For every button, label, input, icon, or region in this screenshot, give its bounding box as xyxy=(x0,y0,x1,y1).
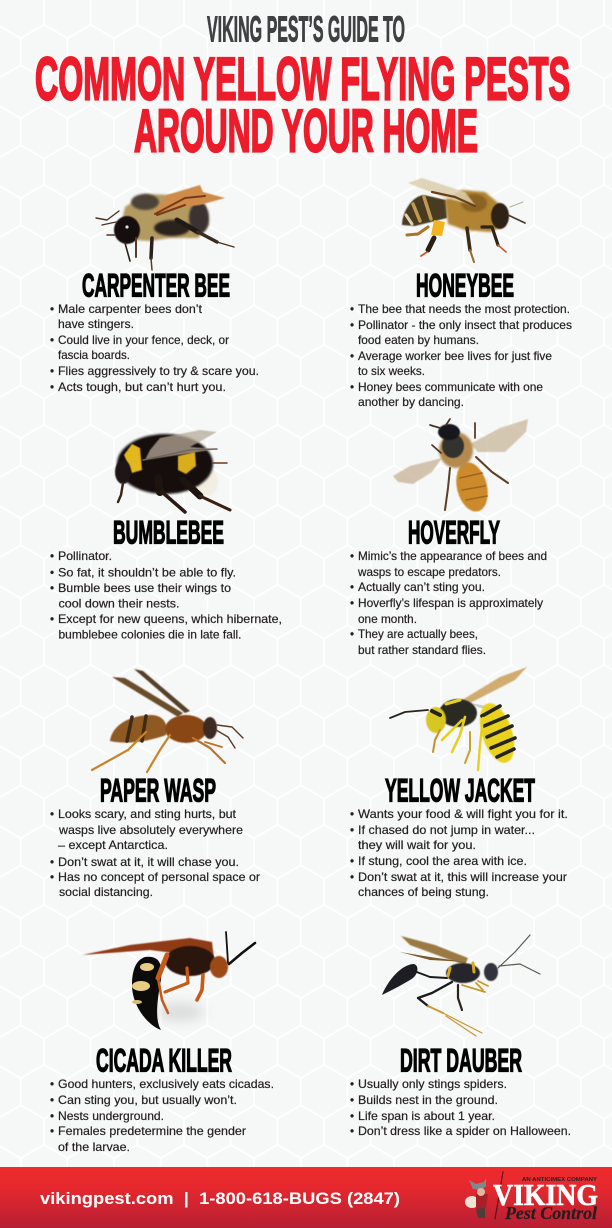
text block: • xyxy=(350,350,354,363)
icon: hoverfly xyxy=(393,419,528,515)
heading: HONEYBEE xyxy=(416,268,514,304)
icon: honeybee xyxy=(402,178,525,262)
text block: • xyxy=(350,1078,354,1091)
text block: • xyxy=(50,1078,54,1091)
icon: yellow jacket xyxy=(390,667,527,770)
text block: • xyxy=(350,1110,354,1123)
text block: Male carpenter bees don’t xyxy=(58,303,203,316)
text block: wasps live absolutely everywhere xyxy=(58,824,243,837)
text block: Hoverfly’s lifespan is approximately xyxy=(358,597,543,610)
text block xyxy=(350,550,547,657)
company tagline: AN ANTICIMEX COMPANY xyxy=(522,1177,597,1183)
heading: CICADA KILLER xyxy=(96,1042,232,1078)
text block: • xyxy=(50,871,54,884)
text block: • xyxy=(350,1125,354,1138)
text block: • xyxy=(50,334,54,347)
text block: Could live in your fence, deck, or xyxy=(58,334,229,347)
text block: Builds nest in the ground. xyxy=(358,1094,498,1107)
text block: Don’t swat at it, it will chase you. xyxy=(58,856,239,869)
icon: viking mascot xyxy=(465,1172,503,1219)
text block: • xyxy=(350,550,354,563)
panel: bumblebee xyxy=(50,430,282,642)
text block: they will wait for you. xyxy=(358,839,476,852)
text block xyxy=(50,808,260,899)
text block: • xyxy=(50,1094,54,1107)
footer band xyxy=(0,1167,612,1228)
logo wordmark: VIKING xyxy=(493,1177,598,1212)
text block: Pollinator - the only insect that produces xyxy=(358,319,572,332)
text block: of the larvae. xyxy=(58,1141,130,1154)
heading: CARPENTER BEE xyxy=(82,268,230,304)
text block: • xyxy=(50,550,54,563)
text block: Average worker bee lives for just five xyxy=(358,350,552,363)
panel: yellow jacket xyxy=(350,667,568,899)
text block: Don’t dress like a spider on Halloween. xyxy=(358,1125,571,1138)
text block: • xyxy=(50,808,54,821)
text block xyxy=(50,1078,274,1154)
text block: If chased do not jump in water... xyxy=(358,824,535,837)
text block: They are actually bees, xyxy=(358,628,478,641)
text block: Females predetermine the gender xyxy=(58,1125,246,1138)
heading: BUMBLEBEE xyxy=(113,514,224,550)
text block: If stung, cool the area with ice. xyxy=(358,855,527,868)
text block: Life span is about 1 year. xyxy=(358,1110,495,1123)
text block: social distancing. xyxy=(59,886,153,899)
text block xyxy=(50,550,282,642)
text block: • xyxy=(50,381,54,394)
text block: wasps to escape predators. xyxy=(357,566,501,579)
text block: • xyxy=(350,303,354,316)
text block: Has no concept of personal space or xyxy=(58,871,260,884)
text block: • xyxy=(350,1094,354,1107)
text block: Looks scary, and sting hurts, but xyxy=(58,808,237,821)
text block: Actually can’t sting you. xyxy=(358,581,485,594)
text block: • xyxy=(350,319,354,332)
text block: • xyxy=(350,628,354,641)
panel: honeybee xyxy=(350,178,572,409)
heading: HOVERFLY xyxy=(408,514,500,550)
text block: • xyxy=(50,1110,54,1123)
heading: PAPER WASP xyxy=(100,772,216,808)
text block: • xyxy=(50,582,54,595)
text block: Usually only stings spiders. xyxy=(358,1078,507,1091)
panel: hoverfly xyxy=(350,419,547,657)
text block: • xyxy=(350,381,354,394)
title block xyxy=(35,8,570,164)
text block: Can sting you, but usually won’t. xyxy=(58,1094,237,1107)
text block xyxy=(350,1078,571,1138)
text block: • xyxy=(50,1125,54,1138)
text block: Nests underground. xyxy=(58,1110,164,1123)
text block: • xyxy=(350,871,354,884)
logo: Viking Pest Control xyxy=(465,1172,598,1223)
panel: paper wasp xyxy=(50,669,260,899)
text block: Mimic’s the appearance of bees and xyxy=(358,550,547,563)
icon: carpenter bee xyxy=(96,185,234,270)
text block: – except Antarctica. xyxy=(58,839,168,852)
panel: cicada killer xyxy=(50,932,274,1154)
text block: food eaten by humans. xyxy=(358,334,479,347)
text block: cool down their nests. xyxy=(58,598,180,610)
contact line: vikingpest.com | 1-800-618-BUGS (2847) xyxy=(40,1190,400,1208)
text block: • xyxy=(350,808,354,821)
text block: • xyxy=(350,581,354,594)
text block: • xyxy=(350,597,354,610)
text block: The bee that needs the most protection. xyxy=(358,303,570,316)
logo subline: Pest Control xyxy=(504,1203,597,1223)
text block: Flies aggressively to try & scare you. xyxy=(58,365,259,378)
text block: Good hunters, exclusively eats cicadas. xyxy=(58,1078,274,1091)
icon: dirt dauber xyxy=(382,935,540,1036)
text block: Except for new queens, which hibernate, xyxy=(58,613,282,626)
icon: paper wasp xyxy=(92,669,243,772)
text block: • xyxy=(350,855,354,868)
text block: fascia boards. xyxy=(58,349,130,362)
panel: carpenter bee xyxy=(50,185,259,394)
text block: • xyxy=(50,365,54,378)
text block: Bumble bees use their wings to xyxy=(58,582,231,595)
text block: • xyxy=(350,824,354,837)
text block: Acts tough, but can’t hurt you. xyxy=(58,381,226,394)
text block: chances of being stung. xyxy=(358,886,489,899)
icon: cicada killer xyxy=(82,932,255,1030)
text block: but rather standard flies. xyxy=(358,644,486,657)
text block: • xyxy=(50,303,54,316)
text block: • xyxy=(50,566,54,580)
text block xyxy=(350,808,568,899)
panel: dirt dauber xyxy=(350,935,571,1138)
text block: So fat, it shouldn’t be able to fly. xyxy=(58,566,236,580)
text block: have stingers. xyxy=(58,318,134,331)
text block xyxy=(350,303,572,409)
text block: to six weeks. xyxy=(358,365,425,378)
text block: Honey bees communicate with one xyxy=(358,381,543,394)
text block: • xyxy=(50,856,54,869)
text block xyxy=(50,303,259,394)
text block: • xyxy=(50,613,54,626)
text block: Wants your food & will fight you for it. xyxy=(358,808,568,821)
text block: bumblebee colonies die in late fall. xyxy=(58,628,242,642)
text block: another by dancing. xyxy=(358,396,464,409)
text block: one month. xyxy=(358,613,417,626)
text block: Pollinator. xyxy=(58,550,112,563)
text block: Don’t swat at it, this will increase your xyxy=(358,871,567,884)
icon: bumblebee xyxy=(115,430,230,512)
